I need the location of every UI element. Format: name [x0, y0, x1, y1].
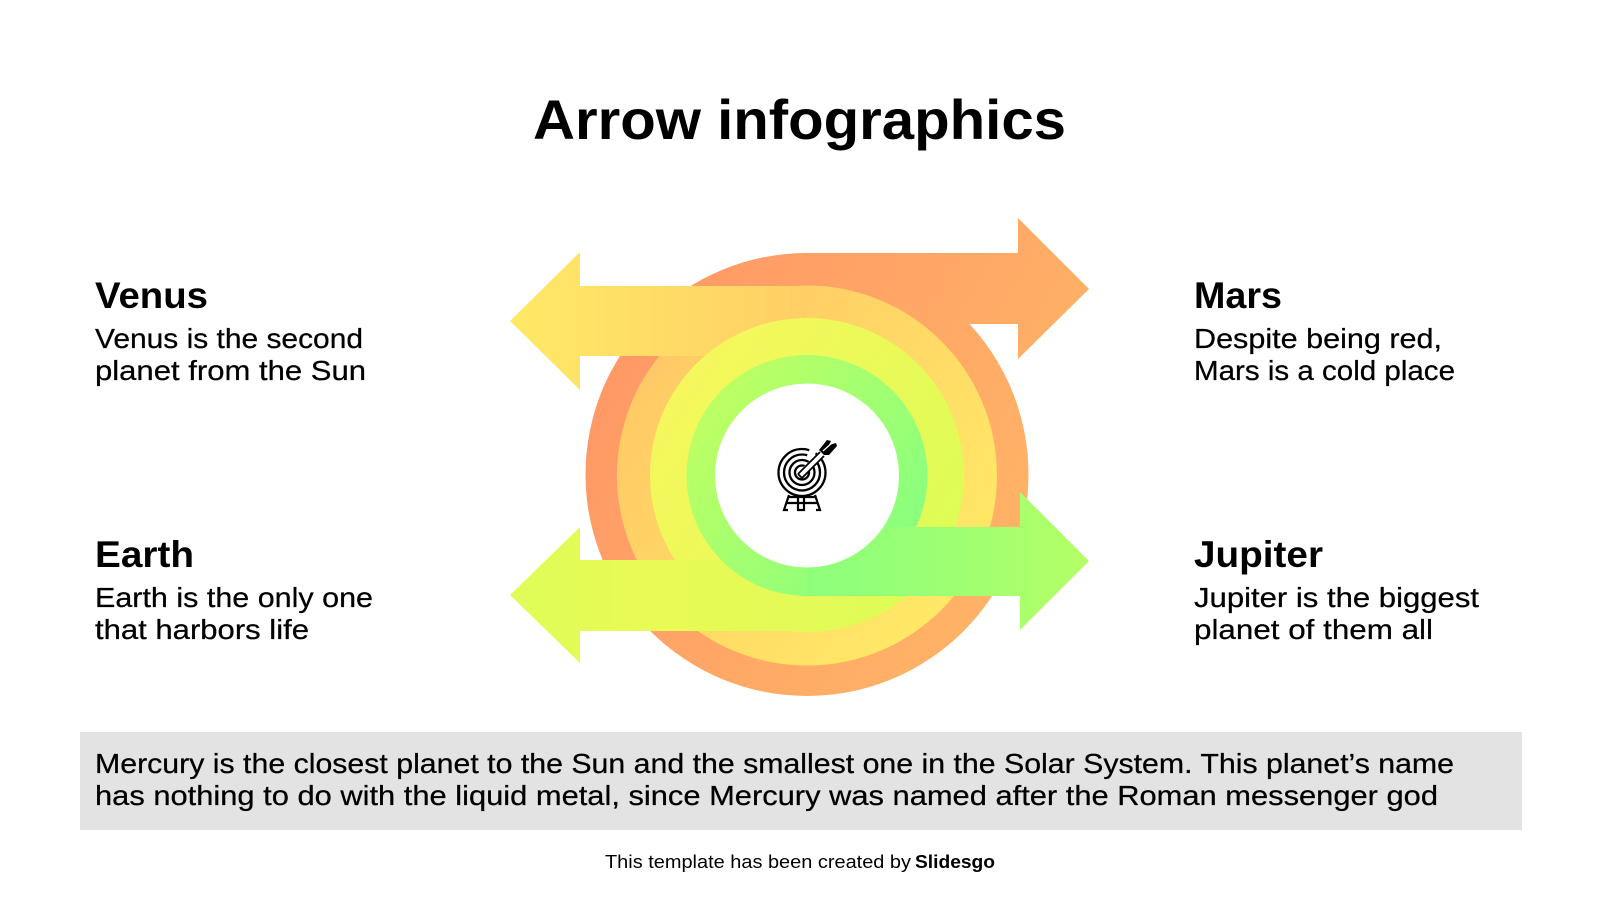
- panel: Mercury description: Mercury is the closest planet to the Sun and the smallest one in the Solar System. This planet’s name: [95, 748, 1454, 779]
- text block: Venus: Venus: [95, 275, 208, 316]
- concentric arrow diagram: [510, 218, 1089, 696]
- text block: Venus: [95, 275, 366, 386]
- text block: Mars: Despite being red,: [1194, 323, 1442, 354]
- arrow: Jupiter green band: [686, 355, 1089, 630]
- panel: Mercury description: [80, 732, 1522, 830]
- footer credit: This template has been created by: [605, 851, 912, 872]
- text block: Jupiter: Jupiter is the biggest: [1194, 582, 1479, 613]
- panel: Mercury description: has nothing to do with the liquid metal, since Mercury was named after the Roman messenger god: [95, 780, 1438, 811]
- text block: Mars: Mars is a cold place: [1194, 355, 1455, 386]
- arrow: Earth yellow-green band: [510, 318, 964, 663]
- center white circle: [715, 384, 899, 568]
- footer credit: Slidesgo: [915, 851, 995, 872]
- text block: Venus: planet from the Sun: [95, 355, 366, 386]
- text block: Mars: Mars: [1194, 275, 1282, 316]
- arrow: Mars orange band: [586, 218, 1089, 696]
- text block: Venus: Venus is the second: [95, 323, 363, 354]
- text block: Earth: Earth is the only one: [95, 582, 373, 613]
- title: Arrow infographics: [533, 88, 1066, 151]
- text block: Earth: [95, 534, 373, 645]
- text block: Jupiter: Jupiter: [1194, 534, 1323, 575]
- text block: Jupiter: planet of them all: [1194, 614, 1433, 645]
- text block: Jupiter: [1194, 534, 1479, 645]
- icon: target with arrow on a stand: [778, 440, 837, 510]
- text block: Earth: Earth: [95, 534, 194, 575]
- text block: Earth: that harbors life: [95, 614, 309, 645]
- arrow: Venus amber band: [510, 252, 997, 666]
- text block: Mars: [1194, 275, 1455, 386]
